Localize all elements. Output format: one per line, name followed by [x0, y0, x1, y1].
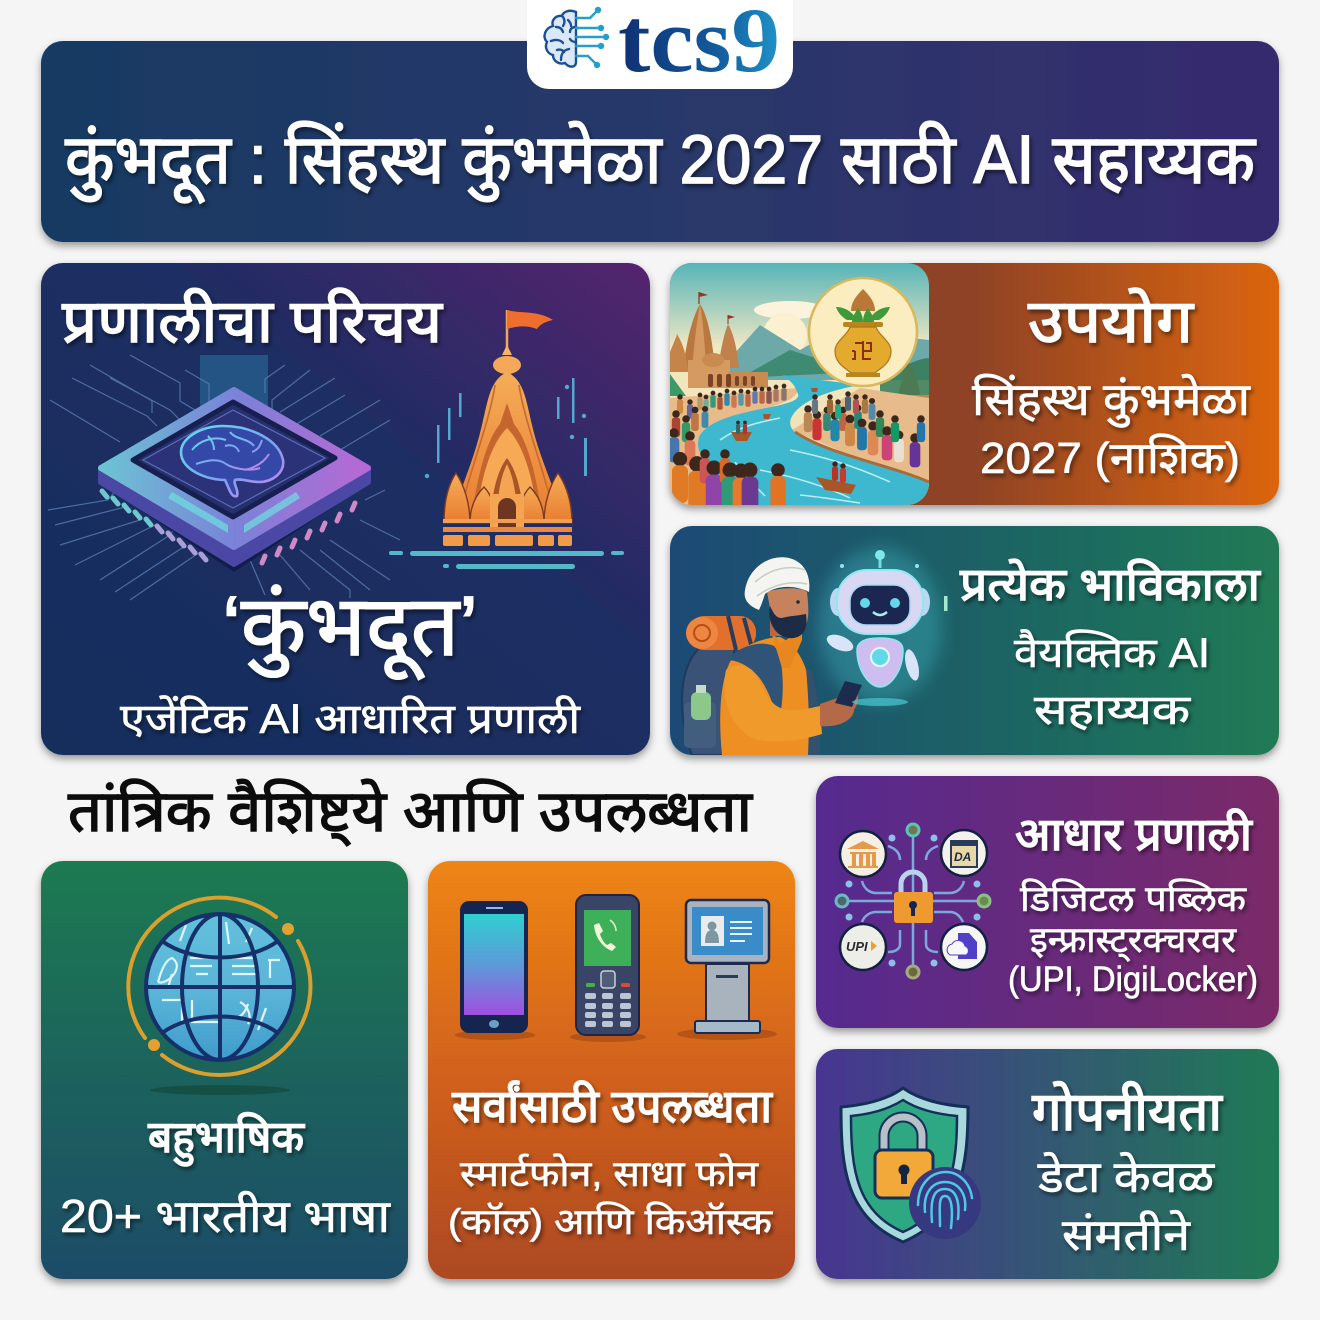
- icon: cloud locker: [941, 924, 987, 970]
- icon: DA document: DA: [954, 850, 971, 864]
- river: [698, 375, 929, 505]
- icon: shield with lock and fingerprint: [841, 1088, 981, 1242]
- crowd right: [804, 391, 925, 467]
- panel: accessibility: [428, 861, 795, 1279]
- base system line 1: डिजिटल पब्लिक: [1020, 878, 1247, 919]
- panel heading: प्रणालीचा परिचय: [62, 288, 443, 355]
- sleeve and hand: [724, 666, 822, 742]
- base system heading: आधार प्रणाली: [1015, 808, 1253, 860]
- panel: base system: [816, 776, 1279, 1028]
- title text: कुंभदूत : सिंहस्थ कुंभमेळा 2027 साठी AI सहाय्यक: [65, 120, 1257, 204]
- personal heading: प्रत्येक भाविकाला: [960, 557, 1261, 610]
- icon: DPI network: [836, 824, 990, 978]
- icon: temple: [389, 310, 624, 569]
- bedroll: [688, 616, 756, 650]
- turban: [745, 557, 809, 610]
- use case heading: उपयोग: [1028, 288, 1194, 355]
- illustration: pilgrim with robot: [682, 547, 942, 755]
- panel: system introduction: [41, 263, 650, 755]
- torso: [720, 637, 809, 755]
- icon: UPI: [840, 924, 886, 970]
- panel: use case: [669, 263, 1279, 517]
- robot: [824, 550, 930, 706]
- temples: [685, 304, 714, 372]
- accessibility line 1: स्मार्टफोन, साधा फोन: [460, 1153, 759, 1194]
- panel: personal assistant: [670, 526, 1279, 755]
- neck and face: [770, 620, 782, 636]
- panel: multilingual: [41, 861, 408, 1279]
- privacy heading: गोपनीयता: [1032, 1081, 1223, 1142]
- ghats: [670, 388, 798, 505]
- icon: circuit brain: [545, 11, 603, 67]
- logo tab: [527, 0, 793, 91]
- icon: globe: [128, 898, 310, 1095]
- accessibility heading: सर्वांसाठी उपलब्धता: [452, 1080, 773, 1132]
- backpack: [682, 639, 734, 755]
- title banner: [41, 41, 1279, 242]
- icon: bank: [840, 831, 886, 877]
- kalash medallion: [809, 278, 917, 386]
- privacy line 2: संमतीने: [1062, 1209, 1192, 1260]
- icon: UPI: UPI: [846, 939, 868, 954]
- base system line 2: इन्फ्रास्ट्रक्चरवर: [1030, 919, 1237, 962]
- icon: smartphone: [455, 901, 535, 1040]
- privacy line 1: डेटा केवळ: [1037, 1151, 1216, 1202]
- icon: AI chip with brain: [48, 355, 400, 600]
- crowd left: [669, 384, 787, 517]
- section heading: तांत्रिक वैशिष्ट्ये आणि उपलब्धता: [68, 779, 753, 847]
- personal line 1: वैयक्तिक AI: [1014, 629, 1210, 676]
- panel: privacy: [816, 1049, 1279, 1279]
- boats: [731, 388, 856, 494]
- use case line 1: सिंहस्थ कुंभमेळा: [972, 372, 1251, 429]
- brain: [181, 426, 283, 496]
- icon: DA document: [941, 830, 987, 876]
- water lines: [389, 551, 624, 569]
- icon: feature phone: [570, 895, 646, 1042]
- system name: ‘कुंभदूत’: [222, 579, 478, 680]
- system description: एजेंटिक AI आधारित प्रणाली: [120, 695, 581, 742]
- base system line 3: (UPI, DigiLocker): [1008, 960, 1258, 999]
- language count: 20+ भारतीय भाषा: [60, 1190, 391, 1242]
- icon: kiosk: [677, 900, 777, 1040]
- illustration: Kumbh Mela riverside: [669, 263, 929, 517]
- personal line 2: सहाय्यक: [1034, 686, 1191, 733]
- multilingual label: बहुभाषिक: [148, 1112, 305, 1166]
- use case line 2: 2027 (नाशिक): [980, 433, 1240, 483]
- accessibility line 2: (कॉल) आणि किऑस्क: [448, 1201, 773, 1242]
- chip pins: [102, 491, 355, 563]
